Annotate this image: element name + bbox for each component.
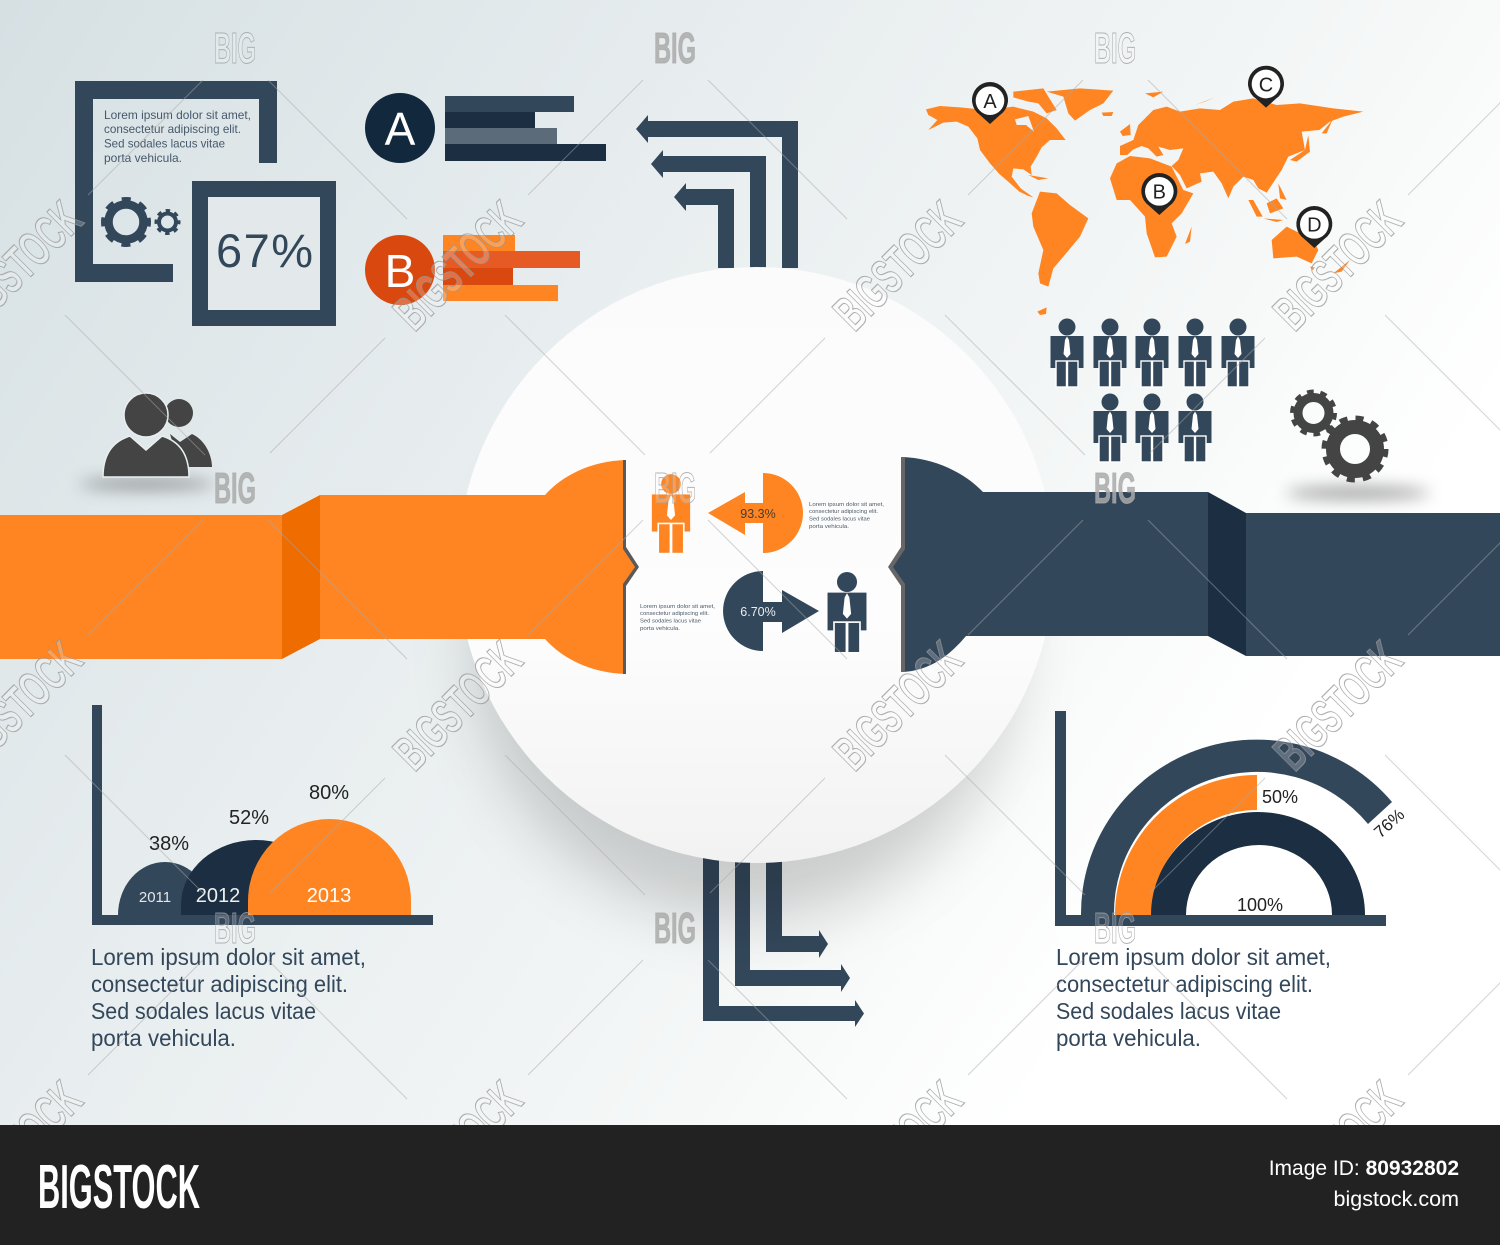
caption: consectetur adipiscing elit. xyxy=(640,611,709,617)
text block: frame copy: Sed sodales lacus vitae xyxy=(104,136,225,150)
disc shadow xyxy=(475,380,1015,920)
pin D xyxy=(1296,206,1332,248)
chart labels: 52% xyxy=(229,807,269,829)
icon: gears xyxy=(104,200,179,244)
arc 76% xyxy=(1081,740,1392,915)
stat box: 67%: 67% xyxy=(216,224,313,277)
chart labels: 80% xyxy=(309,782,349,804)
band fold xyxy=(282,495,320,659)
axes xyxy=(92,705,433,925)
watermark overlay: BIG xyxy=(214,24,256,73)
text block: frame copy: porta vehicula. xyxy=(104,151,182,165)
people pictogram: 8 figures xyxy=(1050,318,1254,462)
watermark overlay: BIGSTOCK xyxy=(383,631,533,781)
value: 93.3% xyxy=(740,507,776,521)
badge B with bars xyxy=(365,235,580,305)
orange torch band xyxy=(0,460,639,674)
hump 2013 xyxy=(248,819,411,915)
axes xyxy=(1055,711,1386,926)
text block: left copy: Lorem ipsum dolor sit amet, xyxy=(91,944,366,970)
panel: stats frame with gears and 67% xyxy=(75,81,328,318)
watermark overlay: BIGSTOCK xyxy=(1263,191,1413,341)
text block: frame copy xyxy=(104,108,251,165)
watermark overlay: BIG xyxy=(1094,904,1136,953)
chart labels: 2012 xyxy=(196,885,240,907)
central disc xyxy=(458,267,1054,863)
watermark overlay: BIG xyxy=(654,24,696,73)
caption: Lorem ipsum dolor sit amet, xyxy=(640,604,716,610)
pin C xyxy=(1248,66,1284,108)
text frame xyxy=(75,81,277,282)
pin A xyxy=(972,82,1008,124)
footer site: bigstock.com xyxy=(1334,1187,1459,1211)
badge A with bars: A xyxy=(385,103,416,155)
navy torch band xyxy=(888,457,1500,672)
chart labels: 38% xyxy=(149,833,189,855)
chart: concentric arcs xyxy=(1055,711,1408,926)
arrow with half disc xyxy=(708,473,803,553)
pin B xyxy=(1141,173,1177,215)
caption: Sed sodales lacus vitae xyxy=(640,618,701,624)
icon: users xyxy=(103,393,212,477)
arrows: top nested elbows xyxy=(636,115,798,268)
caption xyxy=(809,502,885,530)
watermark overlay: BIGSTOCK xyxy=(383,191,533,341)
watermark overlay: BIGSTOCK xyxy=(383,1071,533,1221)
world map with pins xyxy=(926,66,1363,315)
chart labels: 2013 xyxy=(307,885,351,907)
icon: orange person xyxy=(652,474,690,554)
text block: right copy: consectetur adipiscing elit. xyxy=(1056,971,1313,997)
caption: porta vehicula. xyxy=(809,524,850,530)
icon: navy person xyxy=(828,572,866,653)
shadow under users xyxy=(79,479,215,489)
torch head xyxy=(889,457,1208,672)
caption xyxy=(640,604,716,632)
map continents xyxy=(926,88,1363,315)
hump 2012 xyxy=(181,840,331,915)
watermark overlay: BIG xyxy=(214,904,256,953)
arc labels: 100% xyxy=(1237,895,1283,915)
badge A with bars xyxy=(365,93,606,163)
arc labels xyxy=(1237,787,1408,915)
pin D: D xyxy=(1307,215,1322,237)
value: 6.70% xyxy=(740,605,776,619)
shadow under gears xyxy=(1286,487,1430,499)
panel: 93.3% comparison xyxy=(652,473,885,554)
panel: 6.70% comparison xyxy=(640,571,866,653)
arc labels: 76% xyxy=(1370,805,1408,842)
arc 50% xyxy=(1115,775,1257,915)
pin A: A xyxy=(983,91,997,113)
text block: left copy: Sed sodales lacus vitae xyxy=(91,998,316,1024)
watermark overlay: BIG xyxy=(1094,464,1136,513)
panel: A and B bar legends xyxy=(365,93,606,305)
chart: yearly humps xyxy=(92,705,433,925)
torch head xyxy=(320,460,638,674)
footer bar xyxy=(0,1125,1500,1245)
text block: right copy xyxy=(1056,944,1331,1051)
caption: consectetur adipiscing elit. xyxy=(809,509,878,515)
text block: left copy: porta vehicula. xyxy=(91,1025,236,1051)
band fold xyxy=(1208,492,1246,656)
text block: left copy xyxy=(91,944,366,1051)
caption: Sed sodales lacus vitae xyxy=(809,516,870,522)
band tail xyxy=(1246,513,1500,656)
icon: dark gears xyxy=(1292,392,1386,480)
arrow with half disc xyxy=(723,571,819,651)
caption: porta vehicula. xyxy=(640,626,681,632)
arrows: bottom nested elbows xyxy=(703,855,864,1027)
stat box: 67% xyxy=(200,189,328,318)
watermark overlay: BIG xyxy=(654,464,696,513)
watermark overlay: BIGSTOCK xyxy=(1263,1071,1413,1221)
pin C: C xyxy=(1259,74,1273,96)
caption: Lorem ipsum dolor sit amet, xyxy=(809,502,885,508)
footer bar: BIGSTOCK xyxy=(38,1153,200,1222)
watermark overlay: BIG xyxy=(214,464,256,513)
badge B with bars: B xyxy=(385,245,415,297)
hump 2011 xyxy=(118,862,212,915)
band tail xyxy=(0,515,282,659)
text block: frame copy: consectetur adipiscing elit. xyxy=(104,122,241,136)
text block: right copy: Lorem ipsum dolor sit amet, xyxy=(1056,944,1331,970)
watermark overlay: BIG xyxy=(654,904,696,953)
arc labels: 50% xyxy=(1262,787,1298,807)
text block: left copy: consectetur adipiscing elit. xyxy=(91,971,348,997)
chart labels: 2011 xyxy=(139,889,171,906)
watermark overlay: BIGSTOCK xyxy=(823,191,973,341)
arc 100% xyxy=(1151,812,1365,915)
watermark overlay: BIGSTOCK xyxy=(823,1071,973,1221)
chart labels xyxy=(139,782,351,907)
footer image id: Image ID: 80932802 xyxy=(1269,1157,1459,1180)
text block: frame copy: Lorem ipsum dolor sit amet, xyxy=(104,108,251,122)
watermark overlay: BIG xyxy=(1094,24,1136,73)
text block: right copy: Sed sodales lacus vitae xyxy=(1056,998,1281,1024)
text block: right copy: porta vehicula. xyxy=(1056,1025,1201,1051)
pin B: B xyxy=(1153,182,1166,204)
watermark overlay: BIGSTOCK xyxy=(1263,631,1413,781)
watermark overlay: BIGSTOCK xyxy=(823,631,973,781)
